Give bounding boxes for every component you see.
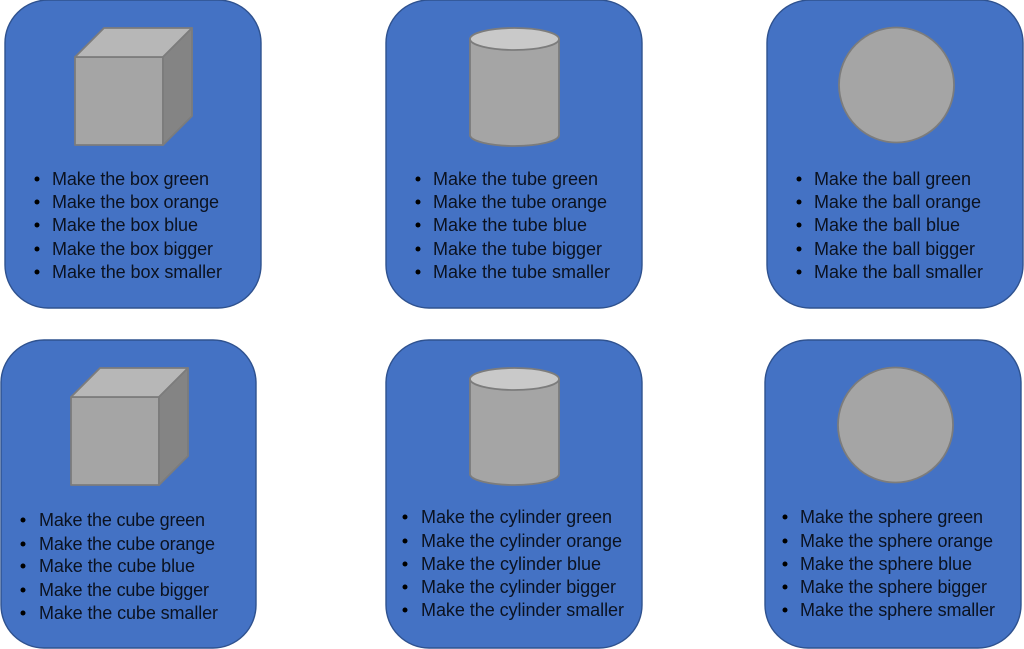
list: tube actions: Make the tube smaller [433, 262, 610, 282]
list: sphere actions: Make the sphere bigger [800, 577, 987, 597]
list: cylinder actions: Make the cylinder green [421, 507, 612, 527]
list: ball actions: Make the ball smaller [814, 262, 983, 282]
panel: tube [386, 0, 642, 308]
list: box actions: Make the box bigger [52, 239, 213, 259]
list: sphere actions [782, 507, 995, 620]
list: cube actions: Make the cube smaller [39, 603, 218, 623]
icon: box [75, 28, 192, 145]
list: tube actions: Make the tube green [433, 169, 598, 189]
list: tube actions: Make the tube blue [433, 215, 587, 235]
list: cube actions: Make the cube bigger [39, 580, 209, 600]
list: box actions: Make the box green [52, 169, 209, 189]
list: tube actions [416, 169, 610, 282]
list: box actions: Make the box orange [52, 192, 219, 212]
list: sphere actions: Make the sphere orange [800, 531, 993, 551]
list: ball actions: Make the ball blue [814, 215, 960, 235]
panel: sphere [765, 340, 1021, 648]
list: cube actions: Make the cube orange [39, 534, 215, 554]
list: box actions [34, 169, 222, 282]
icon: tube [470, 28, 559, 146]
list: sphere actions: Make the sphere smaller [800, 600, 995, 620]
list: cylinder actions: Make the cylinder smaller [421, 600, 624, 620]
list: tube actions: Make the tube orange [433, 192, 607, 212]
list: tube actions: Make the tube bigger [433, 239, 602, 259]
list: cylinder actions: Make the cylinder bigger [421, 577, 616, 597]
panel: cylinder [386, 340, 642, 648]
list: ball actions: Make the ball orange [814, 192, 981, 212]
list: ball actions: Make the ball bigger [814, 239, 975, 259]
list: box actions: Make the box smaller [52, 262, 222, 282]
panel: cube [1, 340, 256, 648]
list: ball actions [796, 169, 983, 282]
icon: ball [839, 28, 954, 142]
list: cylinder actions: Make the cylinder orange [421, 531, 622, 551]
panel: box [5, 0, 261, 308]
list: cube actions [20, 510, 218, 623]
list: ball actions: Make the ball green [814, 169, 971, 189]
list: cube actions: Make the cube green [39, 510, 205, 530]
icon: cylinder [470, 368, 559, 485]
list: sphere actions: Make the sphere blue [800, 554, 972, 574]
list: cylinder actions [402, 507, 624, 620]
list: cylinder actions: Make the cylinder blue [421, 554, 601, 574]
icon: cube [71, 368, 188, 485]
icon: sphere [838, 368, 953, 482]
list: box actions: Make the box blue [52, 215, 198, 235]
list: sphere actions: Make the sphere green [800, 507, 983, 527]
list: cube actions: Make the cube blue [39, 556, 195, 576]
panel: ball [767, 0, 1023, 308]
